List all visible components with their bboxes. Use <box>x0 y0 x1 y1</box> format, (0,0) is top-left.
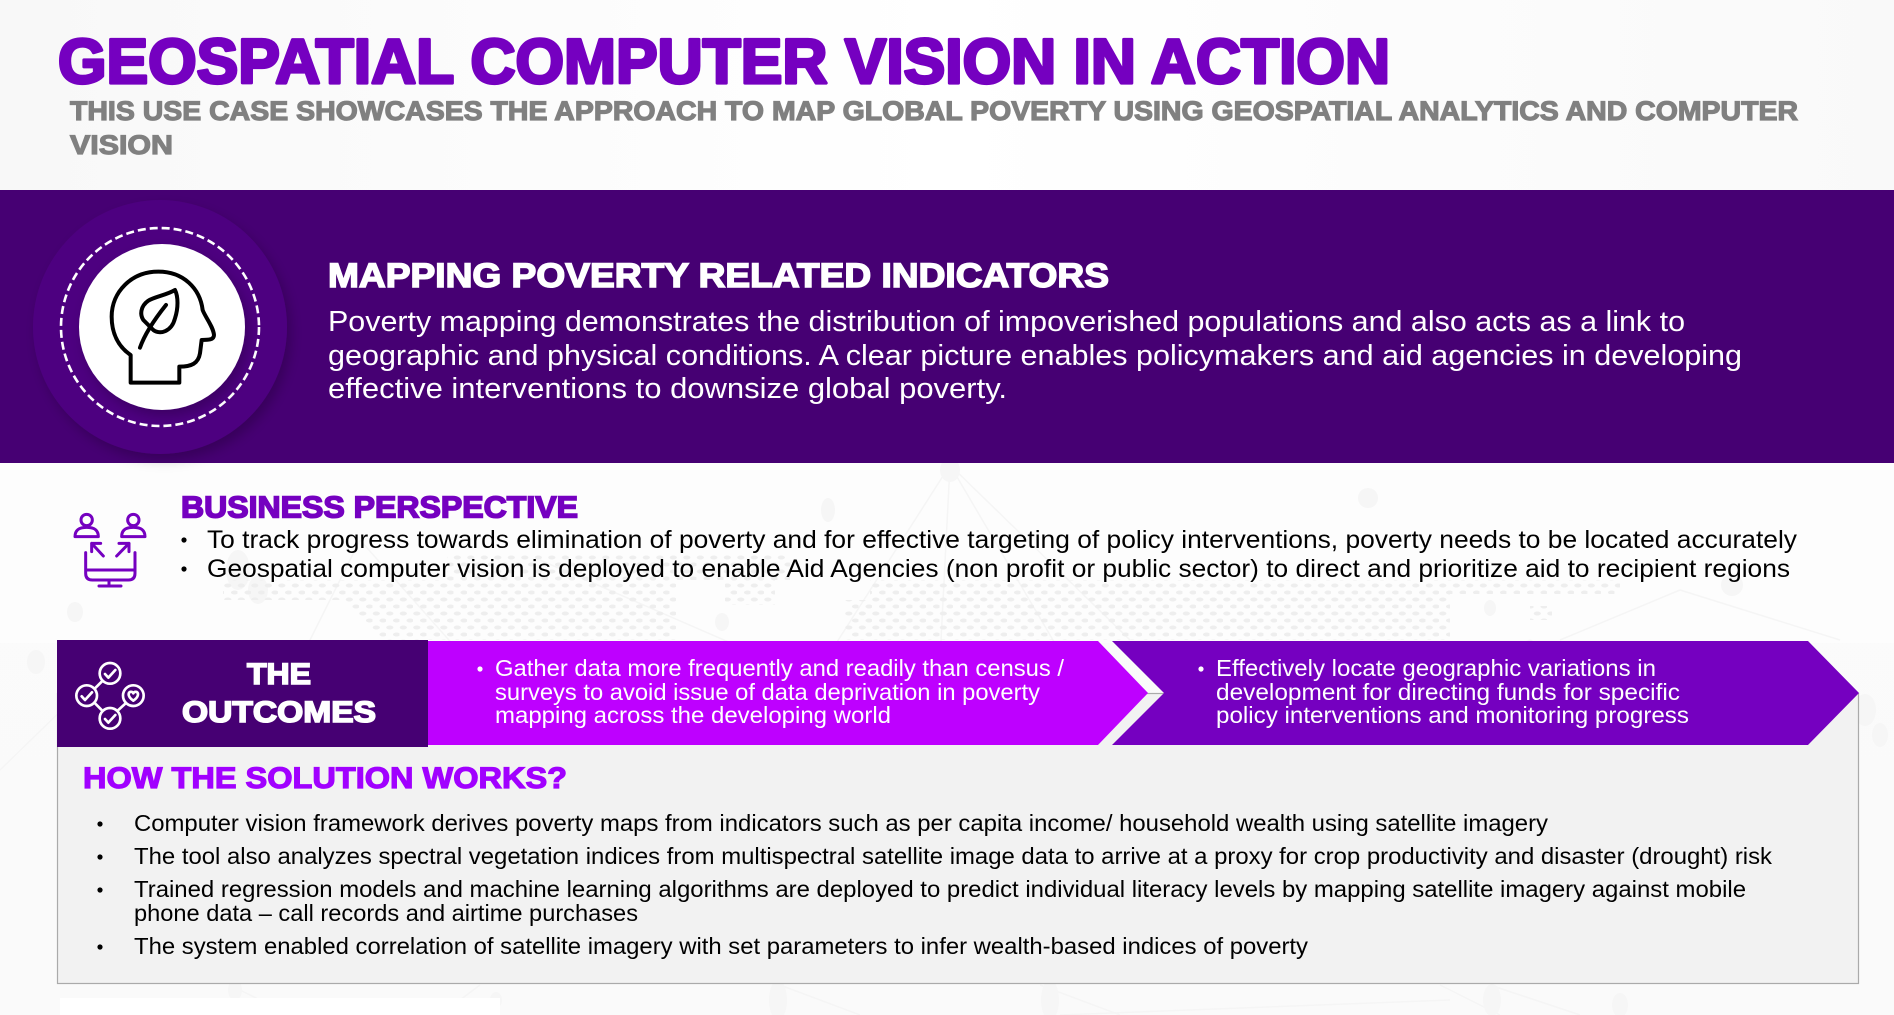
text: banner description: Poverty mapping demonstrates the distribution of impoverished populations and also acts as a link to <box>328 306 1685 338</box>
arrow: outcome two: development for directing funds for specific <box>1216 679 1680 705</box>
icon: connected checkmarks <box>76 663 144 729</box>
text: banner description: geographic and physical conditions. A clear picture enables policymakers and aid agencies in developing <box>328 340 1742 372</box>
text: business bullets: To track progress towards elimination of poverty and for effective targeting of policy interventions, poverty needs to be located accurately <box>207 526 1798 554</box>
text: business bullets: Geospatial computer vision is deployed to enable Aid Agencies (non profit or public sector) to direct and prioritize aid to recipient regions <box>207 555 1790 583</box>
text: solution bullets: phone data – call records and airtime purchases <box>134 900 638 926</box>
icon: head with leaf badge <box>33 200 287 454</box>
text: solution bullets: The system enabled correlation of satellite imagery with set parameters to infer wealth-based indices of poverty <box>134 933 1309 959</box>
section: business perspective <box>75 490 1798 586</box>
arrow: outcome two: Effectively locate geographic variations in <box>1216 655 1656 681</box>
arrow: outcome one <box>428 641 1148 745</box>
text: solution bullets <box>97 810 1773 959</box>
text: banner description <box>328 306 1742 405</box>
heading: business perspective: BUSINESS PERSPECTIVE <box>181 490 578 524</box>
arrow: outcome one: mapping across the developing world <box>495 702 891 728</box>
heading: the outcomes: THE <box>247 658 311 691</box>
text: solution bullets: The tool also analyzes spectral vegetation indices from multispectral satellite image data to arrive at a proxy for crop productivity and disaster (drought) risk <box>134 843 1773 869</box>
heading: the outcomes: OUTCOMES <box>182 696 376 729</box>
panel: the outcomes label <box>57 640 428 747</box>
arrow: outcome one: Gather data more frequently and readily than census / <box>495 655 1065 681</box>
text: solution bullets: Computer vision framework derives poverty maps from indicators such as per capita income/ household wealth using satellite imagery <box>134 810 1549 836</box>
panel: mapping poverty banner <box>0 190 1894 463</box>
text: banner description: effective interventions to downsize global poverty. <box>328 373 1007 405</box>
heading: the outcomes <box>182 658 376 729</box>
panel: how the solution works <box>58 694 1858 984</box>
subtitle <box>70 96 1798 160</box>
arrow: outcome two <box>1112 641 1859 745</box>
title: GEOSPATIAL COMPUTER VISION IN ACTION <box>58 27 1390 97</box>
subtitle: VISION <box>70 130 173 160</box>
text: solution bullets: Trained regression models and machine learning algorithms are deployed to predict individual literacy levels by mapping satellite imagery against mobile <box>134 876 1746 902</box>
subtitle: THIS USE CASE SHOWCASES THE APPROACH TO MAP GLOBAL POVERTY USING GEOSPATIAL ANALYTICS AND COMPUTER <box>70 96 1798 126</box>
heading: mapping poverty related indicators: MAPPING POVERTY RELATED INDICATORS <box>328 257 1109 295</box>
arrow: outcome one: surveys to avoid issue of data deprivation in poverty <box>495 679 1041 705</box>
arrow: outcome two: policy interventions and monitoring progress <box>1216 702 1689 728</box>
icon: people and monitor <box>75 514 145 586</box>
heading: how the solution works: HOW THE SOLUTION WORKS? <box>83 762 567 795</box>
text: business bullets <box>181 526 1798 583</box>
